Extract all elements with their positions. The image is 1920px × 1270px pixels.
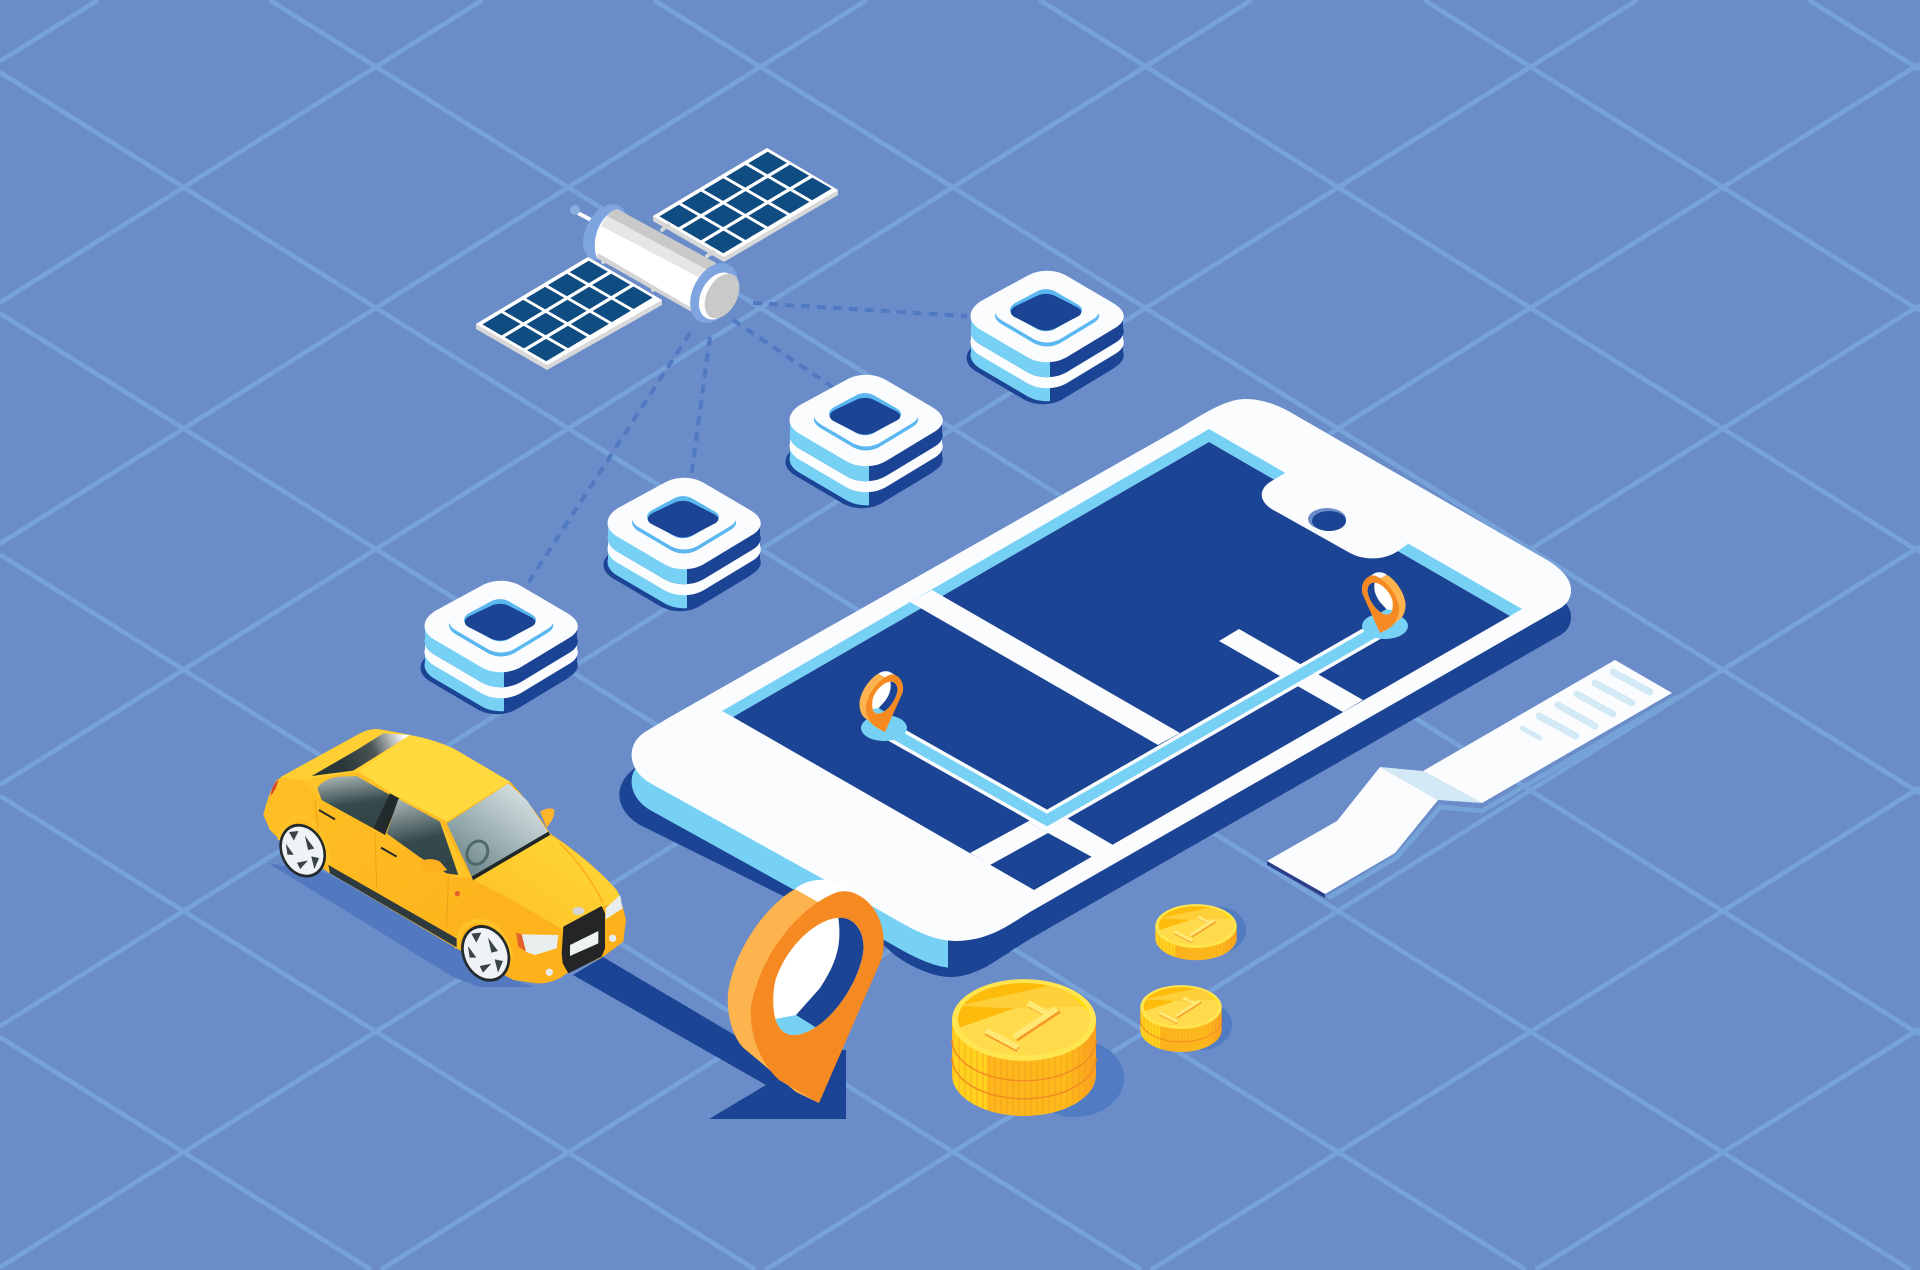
steering wheel [463,837,492,868]
yellow taxi car [263,729,626,990]
car shadow [268,863,533,987]
big coin stack [952,979,1096,1116]
map roads [910,590,1363,865]
receipt upper strip [1423,660,1672,803]
emblem [572,907,584,915]
satellite struts and antenna [570,205,713,290]
receipt [1267,660,1677,898]
windshield wiper strip [472,832,551,881]
fog lights [546,935,616,976]
large location pin [728,880,884,1103]
server stack 4 [420,581,578,714]
rear wheel [271,816,335,885]
side window front [387,799,458,875]
solar panel: lower left [476,257,662,370]
receipt fold [1380,767,1482,803]
windshield [447,783,550,880]
small coin top [1155,904,1237,960]
door lines and handles [315,800,448,927]
satellite body [574,197,748,331]
tail light [271,779,279,796]
phone side [632,604,1572,968]
screen border [722,429,1522,717]
front wheel [452,917,519,990]
smartphone [619,399,1571,977]
grille [562,906,605,973]
receipt shadow line [1328,697,1677,898]
server stack 3 [604,478,761,611]
dashed signal lines from satellite to stacks [514,303,967,605]
mirror left [420,859,447,872]
rear window [312,733,410,776]
route end marker [1362,613,1408,639]
headlight left [516,933,558,955]
small pin: start [859,671,903,732]
wheel arches [279,817,512,957]
hood [473,835,622,930]
mirror right [540,808,554,827]
phone top face [632,399,1571,941]
side window rear [317,776,390,828]
window pillar [373,793,399,835]
car body [263,729,626,983]
server stack 2 [786,375,943,508]
notch with camera [1262,473,1408,558]
hood creases [480,843,603,931]
headlight right [606,895,623,919]
window surround [303,775,472,878]
small coin stack bottom [1140,985,1222,1052]
route start marker [861,715,907,741]
route line [884,630,1378,820]
small pin: destination [1362,572,1406,633]
receipt text lines [1522,672,1650,738]
rear deck [280,729,410,780]
solar panel: upper right [653,148,838,262]
coin shadows [1026,906,1246,1117]
roof [358,735,510,822]
phone drop shadow [619,768,1010,977]
side skirt [328,865,457,947]
server stack 1 [966,271,1124,404]
satellite [476,148,838,370]
long pin and car shadow road [573,957,846,1119]
map screen [733,442,1510,890]
receipt lower strip [1267,767,1438,894]
receipt edge [1267,861,1325,898]
side marker [455,891,460,896]
